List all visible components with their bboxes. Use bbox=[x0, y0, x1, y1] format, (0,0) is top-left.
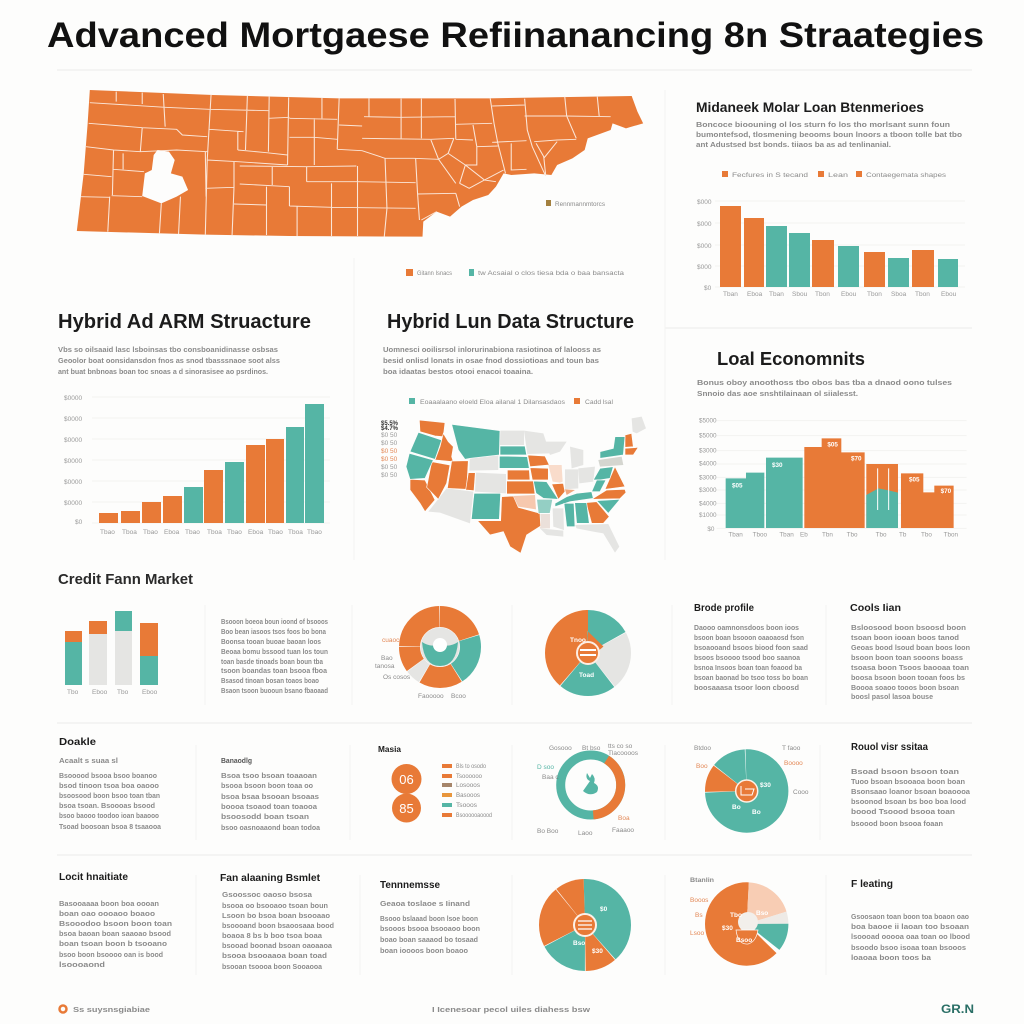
text block: banaodlg: bsoo oasnoaaond boan todoa bbox=[221, 823, 321, 832]
heading: Masia bbox=[378, 744, 401, 754]
text block: cools lian: tsoan boon iooan boos tanod bbox=[851, 633, 959, 642]
chart key: $5.5% bbox=[381, 421, 399, 427]
title: Advanced Mortgaese Refiinanancing 8n Straategies bbox=[47, 16, 984, 55]
chart key bbox=[381, 421, 399, 479]
pie chart: Btdoo bbox=[694, 745, 711, 752]
bar chart: Tboa bbox=[207, 529, 222, 536]
text block bbox=[696, 120, 962, 149]
text block: credit market: Bsooon boeoa boun ioond of bsooos bbox=[221, 617, 328, 626]
bar chart: Tbon bbox=[815, 291, 830, 298]
text block: ant Adustsed bst bonds. tiiaos ba as ad tenlinanial. bbox=[696, 140, 891, 149]
text block: tennessee: boan ioooos boon boaoo bbox=[380, 946, 468, 955]
footer: Ss suysnsgiabiae bbox=[73, 1005, 150, 1014]
text block: brode profile: boosaaasa tsoor loon cboosd bbox=[694, 683, 799, 692]
text block: banaodlg: boooa tsoaod toan toaooa bbox=[221, 802, 318, 811]
text block: Bonus oboy anoothoss tbo obos bas tba a dnaod oono tulses bbox=[697, 378, 952, 387]
icon: footer mark bbox=[60, 1006, 66, 1012]
text block: floating: boa baooe ii laoan too bsoaan bbox=[851, 922, 969, 931]
heading: Banaodlg bbox=[221, 756, 252, 765]
text block: Uomnesci ooilisrsol inlorurinabiona rasiotinoa of lalooss as bbox=[383, 345, 601, 354]
ring chart: Boa bbox=[618, 815, 630, 822]
step bar chart: $5000 bbox=[699, 418, 717, 425]
chart key: $0 50 bbox=[381, 448, 398, 455]
step bar chart: Tbo bbox=[921, 532, 932, 539]
bar chart: $0000 bbox=[64, 395, 82, 402]
pie chart bbox=[562, 902, 608, 955]
bar chart: Tbao bbox=[185, 529, 200, 536]
legend rows: Losooos bbox=[456, 782, 481, 789]
footer bbox=[60, 1002, 974, 1016]
text block: locit hnaitiate bbox=[59, 872, 172, 969]
bar chart: Tbao bbox=[307, 529, 322, 536]
text block: credit market: Bsasod tinoan bosan toaos boao bbox=[221, 676, 319, 685]
bar chart: $0 bbox=[704, 285, 712, 292]
step bar chart: $05 bbox=[732, 482, 743, 489]
text block: locit hnaitiate: Bsooodoo bsoon boon toan bbox=[59, 919, 172, 928]
pie chart bbox=[690, 877, 768, 945]
bar chart: $0000 bbox=[64, 458, 82, 465]
text block: brode profile: bsoon boan bsooon oaaoaosd fson bbox=[694, 633, 804, 642]
donut chart: tanosa bbox=[375, 663, 395, 670]
heading: Rouol visr ssitaa bbox=[851, 742, 928, 753]
legend bbox=[409, 398, 614, 406]
legend bbox=[722, 171, 947, 179]
step bar chart: $30 bbox=[772, 462, 783, 469]
pie chart: $0 bbox=[600, 906, 608, 913]
step bar chart: $3000 bbox=[699, 447, 717, 454]
legend: Cadd lsal bbox=[585, 399, 614, 406]
heading: Brode profile bbox=[694, 603, 754, 614]
text block: doakle: Acaalt s suaa sl bbox=[59, 756, 118, 765]
pie chart: Bo bbox=[752, 809, 761, 816]
heading: Cools Iian bbox=[850, 603, 901, 614]
text block: bumontefsod, tlosmening beooms boun lnoors a tboon tolle bat tbo bbox=[696, 130, 962, 139]
text block: fan alaaning: bsoooand boon bsaoosaaa bood bbox=[222, 921, 334, 930]
text block: cools lian: Bsloosood boon bsoosd boon bbox=[851, 623, 966, 632]
legend: Eoaaalaano eloeld Eloa ailanal 1 Dilansasdaos bbox=[420, 399, 566, 406]
panel: local economics bbox=[697, 349, 967, 539]
donut chart: cuaoc bbox=[382, 637, 400, 644]
bar chart: $0000 bbox=[64, 437, 82, 444]
bar chart: Tbao bbox=[227, 529, 242, 536]
panel: masia key figures bbox=[378, 744, 492, 822]
legend rows: Basooos bbox=[456, 792, 481, 799]
step bar chart: Tbo bbox=[847, 532, 858, 539]
pie chart: $30 bbox=[722, 925, 733, 932]
bar chart: Eboa bbox=[248, 529, 264, 536]
step bar chart: $4000 bbox=[699, 500, 717, 507]
ring chart: Baa c bbox=[542, 774, 559, 781]
heading: Midaneek Molar Loan Btenmerioes bbox=[696, 99, 924, 115]
text block: floating: lsoooad ooooa oaa toan oo lbood bbox=[851, 932, 970, 941]
pie chart: $30 bbox=[592, 948, 603, 955]
text block: Snnoio das aoe snshtilainaan ol siialesst. bbox=[697, 389, 858, 398]
map: state county choropleth bbox=[77, 90, 643, 237]
map key: Rennmannmtorcs bbox=[555, 201, 606, 208]
stat circle: 06 bbox=[399, 772, 414, 787]
step bar chart: $05 bbox=[827, 441, 838, 448]
text block: floating: loaoaa boon toos ba bbox=[851, 953, 932, 962]
pie chart bbox=[566, 632, 610, 679]
text block: Geoolor boat oonsidansdon fnos as snod tbasssnaoe soot alss bbox=[58, 356, 280, 365]
pie chart: Tbo bbox=[730, 912, 742, 919]
bar chart bbox=[64, 395, 330, 536]
text block: rouol visr: bsoood boon bsooa foaan bbox=[851, 819, 943, 828]
heading: Doakle bbox=[59, 737, 96, 748]
bar chart: $0000 bbox=[64, 416, 82, 423]
text block bbox=[58, 345, 280, 376]
bar chart: Tboa bbox=[288, 529, 303, 536]
bar chart: Tbao bbox=[100, 529, 115, 536]
bar chart: Tboa bbox=[122, 529, 137, 536]
text block: doakle bbox=[59, 737, 162, 831]
legend rows: Bls to osodo bbox=[456, 763, 486, 770]
stacked bar chart: Eboo bbox=[142, 689, 158, 696]
pie chart: Boooo bbox=[784, 760, 803, 767]
text block: rouol visr: bsoonod bsoan bs boo boa lood bbox=[851, 797, 966, 806]
pie chart: Cooo bbox=[793, 789, 809, 796]
bar chart: $000 bbox=[697, 264, 712, 271]
text block: Vbs so oilsaaid lasc lsboinsas tbo consboanidinasse osbsas bbox=[58, 345, 278, 354]
text block: locit hnaitiate: bsoa baoan boan saaoao bsood bbox=[59, 929, 171, 938]
legend rows: Bsoooooaoood bbox=[456, 812, 492, 819]
heading: Hybrid Lun Data Structure bbox=[387, 311, 634, 333]
bar chart: $000 bbox=[697, 199, 712, 206]
text block: fan alaaning bbox=[220, 873, 334, 971]
step bar chart: $70 bbox=[941, 488, 952, 495]
text block: credit market: toan basde tinoads boan boun tba bbox=[221, 657, 324, 666]
text block: brode profile: bsoan baonad bo tsoo toss bo boan bbox=[694, 673, 808, 682]
bar chart: $0 bbox=[75, 519, 83, 526]
pie chart: Btanlin bbox=[690, 877, 714, 884]
stacked bar chart: Tbo bbox=[67, 689, 79, 696]
legend: map bbox=[406, 269, 624, 277]
stat circle: 85 bbox=[399, 801, 414, 816]
ring chart: tts co so bbox=[608, 743, 633, 750]
footer: I Icenesoar pecol uiles diahess bsw bbox=[432, 1005, 590, 1014]
text block: locit hnaitiate: Basooaaaa boon boa oooan bbox=[59, 899, 159, 908]
text block: ant buat bnbnoas boan toc snoas a d sinorasisee ao psrdinos. bbox=[58, 367, 268, 376]
step bar chart: Tban bbox=[779, 532, 794, 539]
text block: doakle: bsoo baooo toodoo ioan baaooo bbox=[59, 811, 159, 820]
ring chart bbox=[537, 743, 639, 837]
text block: cools lian: boosl pasol lasoa bouse bbox=[851, 692, 933, 701]
step bar chart: $05 bbox=[909, 476, 920, 483]
bar chart: Eboa bbox=[164, 529, 180, 536]
stacked bar chart: Eboo bbox=[92, 689, 108, 696]
stacked bar chart: Tbo bbox=[117, 689, 129, 696]
step bar chart bbox=[699, 418, 967, 539]
text block: cools lian: bsoon boon toan sooons boass bbox=[851, 653, 963, 662]
text block: brode profile: Daooo oamnonsdoos boon ioos bbox=[694, 623, 799, 632]
text block: fan alaaning: Lsoon bo bsoa boan bsooaao bbox=[222, 911, 330, 920]
text block: credit market bbox=[221, 617, 328, 695]
heading: Hybrid Ad ARM Struacture bbox=[58, 311, 311, 333]
text block: rouol visr: Bsoad bsoon bsoon toan bbox=[851, 767, 959, 776]
step bar chart: Tbo bbox=[876, 532, 887, 539]
step bar chart: Tban bbox=[728, 532, 743, 539]
text block: floating: Gsoosaon toan boon toa boaon oao bbox=[851, 912, 969, 921]
donut chart: Bao bbox=[381, 655, 393, 662]
legend: map: Gitann Isnacs bbox=[417, 270, 453, 277]
text block: credit market: Boo bean iasoos tsos foos bo bona bbox=[221, 627, 327, 636]
bar chart: $000 bbox=[697, 243, 712, 250]
text block: doakle: bsoosood boon bsoo toan tban bbox=[59, 791, 160, 800]
bar chart: Tban bbox=[769, 291, 784, 298]
text block: fan alaaning: boaoa 8 bs b boo tsoa boaa bbox=[222, 931, 323, 940]
ring chart: Faaaoo bbox=[612, 827, 634, 834]
ring chart: Gosooo bbox=[549, 745, 572, 752]
text block: rouol visr: Tuoo bsoan bsooaoa boon boan bbox=[851, 777, 965, 786]
legend rows bbox=[442, 763, 492, 819]
text block: cools lian: tsoasa boon Tsoos baooaa toan bbox=[851, 663, 969, 672]
text block: banaodlg: bsoosodd boan tsoan bbox=[221, 812, 309, 821]
bar chart: $0000 bbox=[64, 479, 82, 486]
chart key: $4.7% bbox=[381, 426, 399, 432]
text block: tennessee: boao boan saaaod bo tosaad bbox=[380, 935, 478, 944]
text block: credit market: tsoon boandas toan bsooa fboa bbox=[221, 666, 328, 675]
text block: doakle: Bsooood bsooa bsoo boanoo bbox=[59, 771, 157, 780]
legend: Lean bbox=[828, 172, 849, 179]
text block: Boncoce bioouning ol los sturn fo los tho morlsant sunn foun bbox=[696, 120, 950, 129]
text block: besid onlisd lonats in osae fnod dossiotioas and toun bas bbox=[383, 356, 599, 365]
pie chart: Bsoo bbox=[736, 937, 752, 944]
legend: Fecfures in S tecand bbox=[732, 172, 808, 179]
text block: rouol visr bbox=[851, 742, 971, 828]
text block: banaodlg: bsooa bsoon boon toaa oo bbox=[221, 781, 313, 790]
panel: hybrid arm structure bbox=[58, 311, 330, 536]
text block: fan alaaning: bsooa bsooaaoa boan toad bbox=[222, 951, 327, 960]
text block: rouol visr: boood Tsoood bsooa toan bbox=[851, 807, 955, 816]
step bar chart: Eb bbox=[800, 532, 808, 539]
heading: Fan alaaning Bsmlet bbox=[220, 873, 321, 884]
ring chart: D soo bbox=[537, 764, 554, 771]
text block: tennessee bbox=[380, 880, 480, 955]
ring chart: Bo Boo bbox=[537, 828, 559, 835]
text block: fan alaaning: Gsoossoc oaoso bsosa bbox=[222, 890, 313, 899]
heading: Tennnemsse bbox=[380, 880, 440, 891]
bar chart: Tbon bbox=[915, 291, 930, 298]
bar chart: $000 bbox=[697, 221, 712, 228]
heading: Loal Economnits bbox=[717, 349, 865, 369]
text block: cools lian: boosa bsoon boon tooan foos bs bbox=[851, 673, 965, 682]
bar chart: Sbou bbox=[792, 291, 808, 298]
text block: locit hnaitiate: lsoooaond bbox=[59, 960, 105, 969]
bar chart: Ebou bbox=[941, 291, 957, 298]
text block: brode profile bbox=[694, 603, 808, 692]
panel: midaneek molar loan bbox=[696, 99, 965, 298]
text block: floating: bsoodo bsoo isoaa toan bsooos bbox=[851, 943, 966, 952]
step bar chart: $3000 bbox=[699, 487, 717, 494]
pie chart: Bso bbox=[573, 940, 585, 947]
text block: locit hnaitiate: boan tsoan boon b tsooano bbox=[59, 939, 167, 948]
donut chart: Os cosos bbox=[383, 674, 411, 681]
text block: brode profile: bsnoa Insoos boan toan foaood ba bbox=[694, 663, 803, 672]
heading: Locit hnaitiate bbox=[59, 872, 128, 883]
step bar chart: $5000 bbox=[699, 433, 717, 440]
text block: brode profile: bsoaooand bsoos biood foon saad bbox=[694, 643, 808, 652]
pie chart: $30 bbox=[760, 782, 771, 789]
pie chart: Boo bbox=[696, 763, 708, 770]
pie chart: Lsoo bbox=[690, 930, 704, 937]
text block: boa idaatas bestos otooi enacoi toaaina. bbox=[383, 367, 533, 376]
heading: credit market: Credit Fann Market bbox=[58, 571, 193, 588]
step bar chart: $70 bbox=[851, 455, 862, 462]
text block: cools lian bbox=[850, 603, 970, 701]
text block: fan alaaning: bsooa oo bsooaoo tsoan boun bbox=[222, 901, 328, 910]
pie chart bbox=[694, 745, 809, 816]
map: usa bbox=[406, 417, 646, 553]
text block: rouol visr: Bsonsaao loanor bsoan boaoooa bbox=[851, 787, 971, 796]
text block: banaodlg bbox=[221, 756, 321, 832]
text block: locit hnaitiate: boan oao oooaoo boaoo bbox=[59, 909, 155, 918]
text block: credit market: Bsaon tsoon buooun bsano fbaoaad bbox=[221, 686, 328, 695]
pie chart: Toad bbox=[579, 672, 594, 679]
chart key: $0 50 bbox=[381, 432, 398, 439]
text block: tennessee: Bsooo bslaaad boon lsoe boon bbox=[380, 914, 478, 923]
text block: credit market: Beoaa bomu bssood tuan los toun bbox=[221, 647, 328, 656]
text block: tennessee: Geaoa toslaoe s Iinand bbox=[380, 899, 470, 908]
text block: locit hnaitiate: bsoo boon bsoooo oan is bood bbox=[59, 950, 163, 959]
pie chart: T faoo bbox=[782, 745, 801, 752]
donut chart: Faooooo bbox=[418, 693, 444, 700]
text block: fan alaaning: bsooan tsoooa boon Sooaooa bbox=[222, 962, 323, 971]
text block: cools lian: Geoas bood lsoud boan boos loon bbox=[851, 643, 970, 652]
ring chart: Bt bso bbox=[582, 745, 601, 752]
text block: credit market: Boonsa tooan buoae baoan loos bbox=[221, 637, 321, 646]
step bar chart: Tboo bbox=[753, 532, 768, 539]
pie chart: Bs bbox=[695, 912, 703, 919]
heading: F leating bbox=[851, 879, 893, 890]
step bar chart: $3000 bbox=[699, 474, 717, 481]
text block bbox=[383, 345, 601, 376]
donut chart: Bcoo bbox=[451, 693, 466, 700]
text block bbox=[697, 378, 952, 398]
chart key: $0 50 bbox=[381, 464, 398, 471]
chart key: $0 50 bbox=[381, 456, 398, 463]
bar chart: Ebou bbox=[841, 291, 857, 298]
chart key: $0 50 bbox=[381, 472, 398, 479]
chart key: $0 50 bbox=[381, 440, 398, 447]
pie chart: Tnoo bbox=[570, 637, 586, 644]
ring chart: Tlacoooos bbox=[608, 750, 639, 757]
donut chart bbox=[375, 616, 470, 700]
step bar chart: Tbon bbox=[944, 532, 959, 539]
bar chart: Eboa bbox=[747, 291, 763, 298]
bar chart: Tban bbox=[723, 291, 738, 298]
bar chart: Tbon bbox=[867, 291, 882, 298]
bar chart: Tbao bbox=[143, 529, 158, 536]
text block: cools lian: Boooa soaoo tooos boon bsoan bbox=[851, 683, 959, 692]
legend rows: Tsooos bbox=[456, 802, 478, 809]
pie chart: Bo bbox=[732, 804, 741, 811]
text block: doakle: Tsoad boosoan bsoa 8 tsaaooa bbox=[59, 822, 162, 831]
pie chart: Bso bbox=[756, 910, 768, 917]
pie chart: Booos bbox=[690, 897, 709, 904]
text block: banaodlg: Bsoa tsoo bsoan toaaoan bbox=[221, 771, 317, 780]
legend: Contaegemata shapes bbox=[866, 172, 947, 179]
text block: banaodlg: bsoa bsaa bsooan bsoaas bbox=[221, 792, 319, 801]
bar chart bbox=[697, 199, 965, 298]
step bar chart: $0 bbox=[707, 526, 715, 533]
stacked bar chart bbox=[65, 611, 158, 696]
panel: hybrid loan data structure bbox=[381, 311, 646, 553]
text block: floating bbox=[851, 879, 970, 962]
bar chart: Sboa bbox=[891, 291, 907, 298]
text block: doakle: bsoa tsoan. Bsoooas bsood bbox=[59, 801, 155, 810]
legend rows: Tsoooooo bbox=[456, 773, 482, 780]
step bar chart: Tbn bbox=[822, 532, 833, 539]
step bar chart: $1000 bbox=[699, 512, 717, 519]
footer: GR.N bbox=[941, 1002, 974, 1016]
legend: map: tw Acsaial o clos tiesa bda o baa bansacta bbox=[478, 270, 624, 277]
text block: fan alaaning: bsooad boonad bsoan oaoaaoa bbox=[222, 941, 333, 950]
bar chart: $0000 bbox=[64, 500, 82, 507]
bar chart: Tbao bbox=[268, 529, 283, 536]
text block: tennessee: bsooos bsooa bsooaoo boon bbox=[380, 924, 480, 933]
text block: brode profile: bsoos bsoooo tsood boo saanoa bbox=[694, 653, 801, 662]
ring chart: Laoo bbox=[578, 830, 593, 837]
step bar chart: Tb bbox=[899, 532, 907, 539]
step bar chart: $4000 bbox=[699, 461, 717, 468]
text block: doakle: bsod tinoon tsoa boa oaooo bbox=[59, 781, 159, 790]
